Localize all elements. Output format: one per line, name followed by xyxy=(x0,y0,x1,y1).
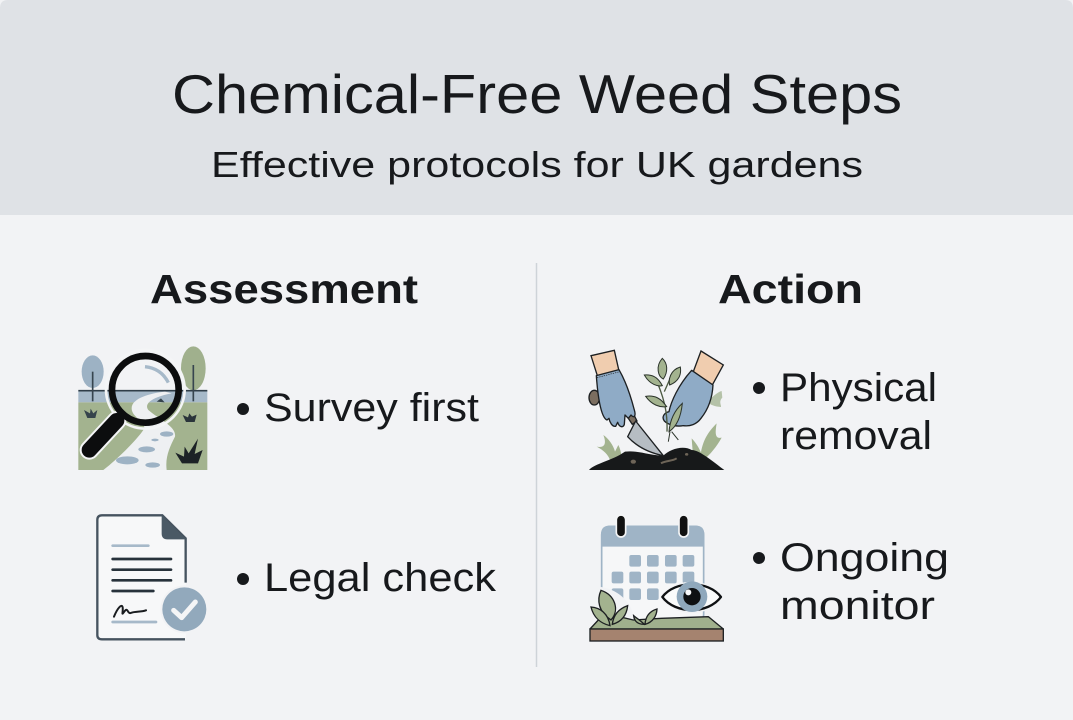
column divider xyxy=(536,263,538,667)
title: Chemical-Free Weed Steps xyxy=(172,63,902,125)
bullet: Ongoing monitor xyxy=(753,536,949,628)
heading: Action: Action xyxy=(718,266,863,312)
subtitle: Effective protocols for UK gardens xyxy=(211,144,863,185)
icon: signed document with check badge xyxy=(97,515,208,639)
bullet: Ongoing monitor: Ongoing xyxy=(780,536,949,580)
header band xyxy=(0,0,1073,215)
bullet: Physical removal: Physical xyxy=(780,366,937,410)
bullet: Survey first: Survey first xyxy=(264,386,479,430)
icon: calendar with eye and soil bed xyxy=(590,515,724,641)
bullet: Physical removal: removal xyxy=(780,414,932,458)
heading: Assessment: Assessment xyxy=(150,266,418,312)
bullet: Ongoing monitor: monitor xyxy=(780,584,935,628)
icon: magnifying glass over landscape xyxy=(78,346,207,470)
bullet: Legal check: Legal check xyxy=(264,556,497,600)
bullet: Physical removal xyxy=(753,366,937,458)
icon: gloved hands with trowel and plant xyxy=(589,350,724,470)
